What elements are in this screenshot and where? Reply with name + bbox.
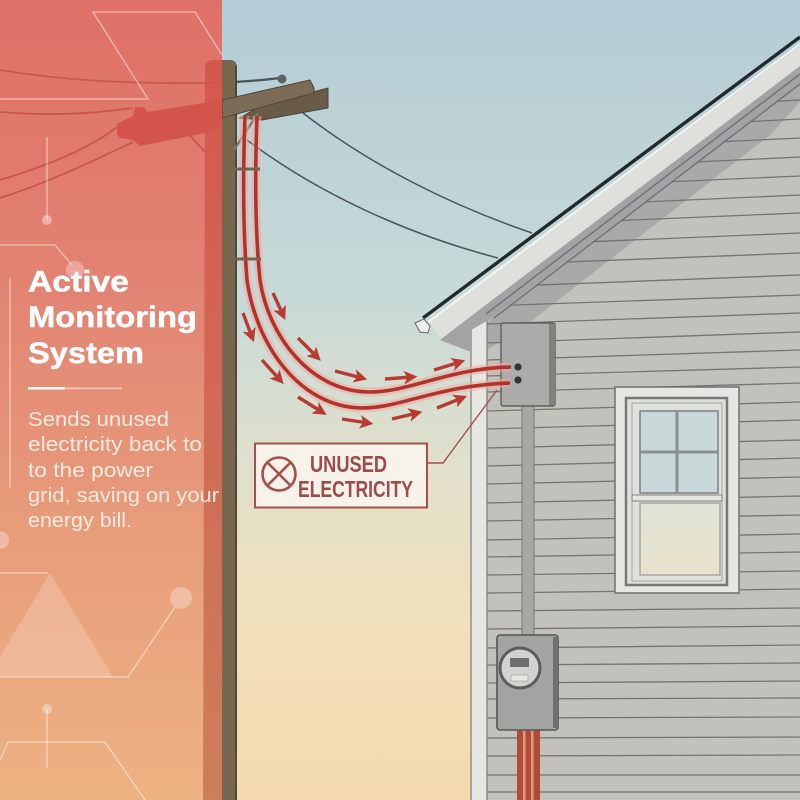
house wall with siding [487, 75, 800, 800]
callout text: ELECTRICITY [298, 476, 413, 502]
meeting rail [632, 495, 722, 501]
cable lines [244, 116, 511, 408]
window [615, 387, 739, 593]
decorative circuit lines [0, 12, 222, 800]
panel: active monitoring system [0, 0, 222, 800]
heading: System [28, 337, 144, 370]
electrical box [501, 323, 555, 406]
power lines to house [235, 78, 532, 258]
body text [28, 408, 219, 532]
conduit [522, 405, 534, 636]
upper sash glass [640, 411, 718, 493]
crossarms [222, 74, 328, 150]
crossarm seen through panel [117, 100, 222, 146]
body text: electricity back to [28, 433, 202, 456]
soffit [440, 62, 800, 352]
gutter end [415, 319, 430, 333]
body text: Sends unused [28, 408, 169, 431]
decorative triangle and dots [0, 215, 192, 714]
casing [615, 387, 739, 593]
shingle line [423, 37, 800, 318]
body text: energy bill. [28, 509, 132, 532]
body text: grid, saving on your [28, 484, 219, 507]
red cables from pole to house [244, 116, 511, 408]
electric meter [497, 635, 558, 730]
heading [28, 266, 197, 370]
callout text [298, 451, 413, 502]
callout: unused electricity [255, 444, 427, 508]
heading: Active [28, 266, 129, 298]
callout leader line [427, 390, 497, 463]
roof edge [415, 37, 800, 352]
callout text: UNUSED [310, 451, 387, 477]
wires seen through panel [0, 70, 222, 198]
heading: Monitoring [28, 301, 197, 334]
red cables on meter conduit [517, 730, 540, 800]
body text: to the power [28, 459, 153, 482]
corner board [471, 312, 487, 800]
roof shadow on siding [487, 85, 800, 350]
sash [632, 403, 722, 581]
cable straps [235, 169, 261, 259]
cable glow [244, 116, 511, 408]
icon: crossed circle [262, 458, 296, 490]
lower sash glass [640, 503, 720, 575]
fascia board [428, 46, 800, 339]
heading divider [28, 387, 122, 390]
pole seen through panel [203, 60, 222, 800]
utility pole [222, 60, 328, 800]
flow arrows [243, 293, 462, 423]
